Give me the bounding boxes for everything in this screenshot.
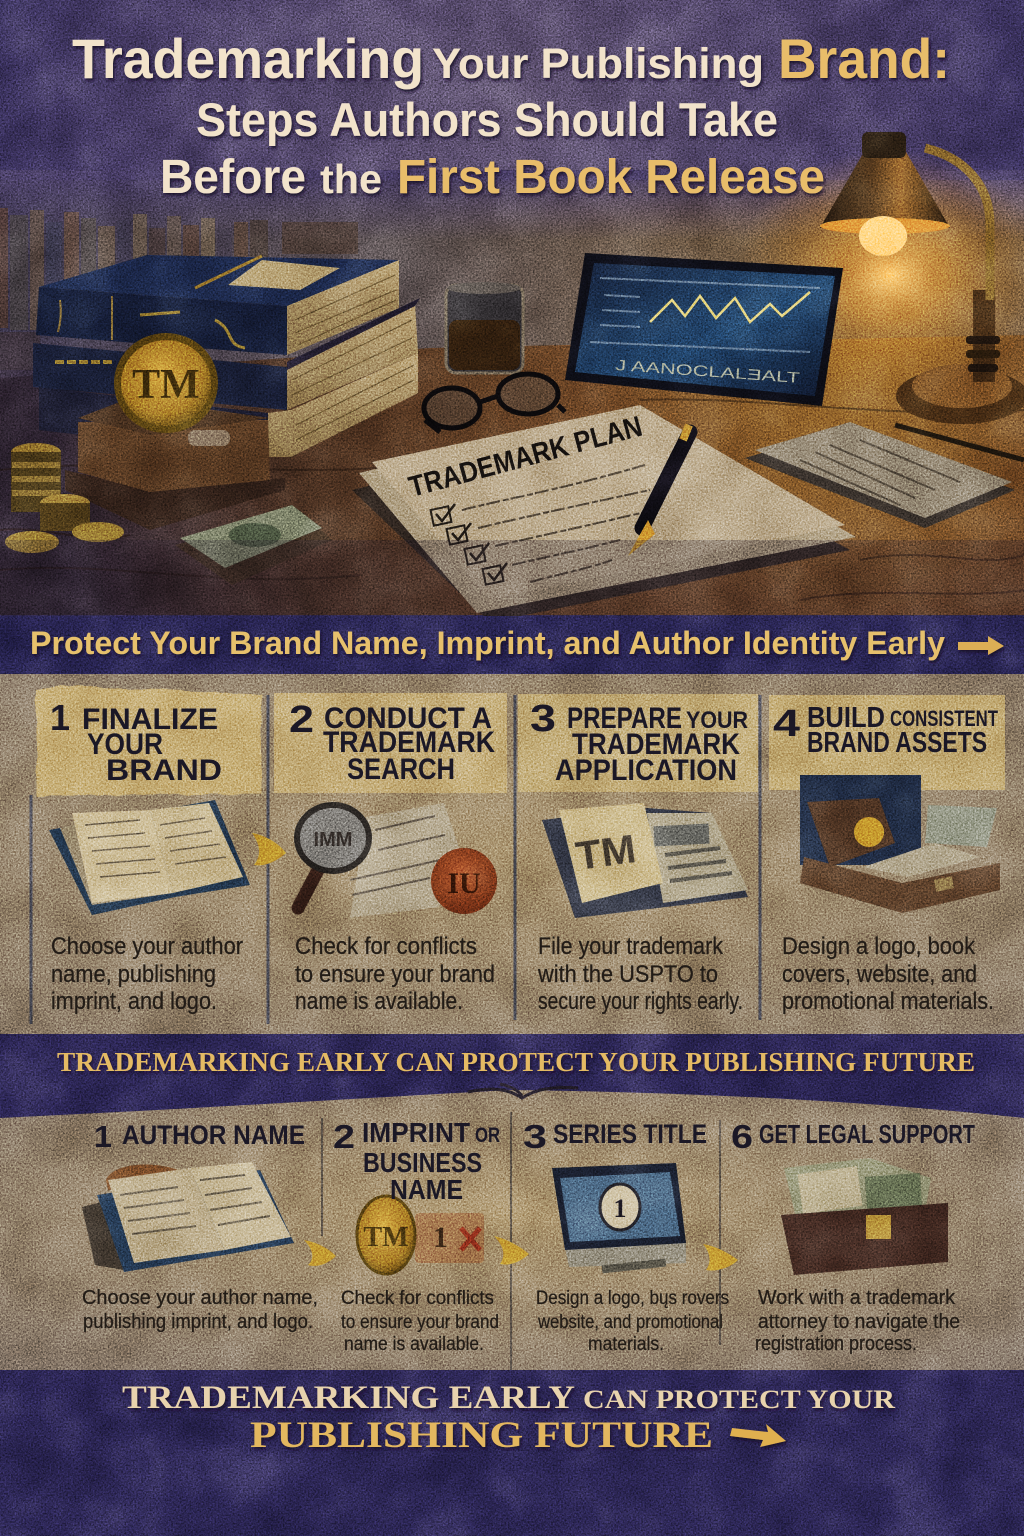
TM coin xyxy=(114,333,218,433)
closing statement: TRADEMARKING EARLY xyxy=(122,1380,575,1416)
trademark plan document xyxy=(352,405,856,622)
tablet with chart: J AANOCLALƎALT xyxy=(615,357,800,387)
bookshelf xyxy=(0,208,358,382)
step 2 heading: TRADEMARK xyxy=(323,726,495,759)
step 2 heading: SEARCH xyxy=(347,753,455,786)
step 3 heading: PREPARE xyxy=(567,702,682,735)
note on book xyxy=(228,260,340,290)
card 2 header xyxy=(274,693,507,793)
item 1 heading: AUTHOR NAME xyxy=(122,1120,305,1150)
tablet with chart xyxy=(565,253,843,406)
band 1 heading: Protect Your Brand Name, Imprint, and Author Identity Early xyxy=(30,625,945,661)
plan checklist xyxy=(431,465,650,585)
steps panel background xyxy=(0,674,1024,1034)
item 4 body: attorney to navigate the xyxy=(758,1311,960,1333)
item 2 heading: BUSINESS xyxy=(363,1147,482,1178)
lamp arm xyxy=(925,148,990,300)
top book xyxy=(36,287,287,355)
step 1 body xyxy=(51,933,243,1015)
step 2 body: to ensure your brand xyxy=(295,961,495,988)
item 1 body: publishing imprint, and logo. xyxy=(83,1311,313,1333)
gold arrow 4 xyxy=(703,1244,738,1271)
closing arrow xyxy=(730,1424,786,1447)
title: Brand: xyxy=(778,27,950,90)
item 3 body: Design a logo, bųs rovers xyxy=(536,1288,729,1309)
item 2 body: name is available. xyxy=(344,1334,484,1355)
middle book xyxy=(33,343,287,410)
item 1 body: Choose your author name, xyxy=(82,1287,318,1309)
step 3 body: with the USPTO to xyxy=(537,961,718,988)
band 1 arrow xyxy=(958,636,1004,655)
step 4 body xyxy=(782,933,994,1015)
wooden box xyxy=(65,398,285,530)
step 4 body: promotional materials. xyxy=(782,988,994,1015)
card 3 header xyxy=(518,694,758,792)
step 3 heading: APPLICATION xyxy=(555,754,737,787)
title: Before xyxy=(160,151,306,204)
lamp glow xyxy=(735,150,1024,400)
step 1 heading: 1 xyxy=(50,697,70,738)
TM coin: TM xyxy=(132,362,200,408)
gold arrow 3 xyxy=(494,1236,529,1265)
item 2 body: Check for conflicts xyxy=(341,1288,494,1309)
book stack xyxy=(33,255,420,457)
lower panel parchment xyxy=(0,1090,1024,1370)
step 4 body: Design a logo, book xyxy=(782,933,976,960)
item 3 body: materials. xyxy=(588,1334,664,1355)
step 3 heading xyxy=(530,698,748,787)
gold arrow 2 xyxy=(304,1240,336,1266)
item 4 body: Work with a trademark xyxy=(758,1287,956,1309)
item 4 body xyxy=(755,1287,960,1355)
item 3 body: website, and promotional xyxy=(537,1312,723,1333)
panel: four steps xyxy=(0,674,1024,1034)
card 2 illustration: magnifier and seal: IMM xyxy=(314,829,352,851)
step 1 body: imprint, and logo. xyxy=(51,988,217,1015)
step 1 body: name, publishing xyxy=(51,961,216,988)
desk surface xyxy=(0,335,1024,615)
step 4 heading xyxy=(773,702,998,759)
step 2 body xyxy=(295,933,495,1015)
item 2 heading: IMPRINT xyxy=(362,1117,470,1148)
title: Trademarking xyxy=(72,27,424,90)
title xyxy=(72,27,950,204)
card 2 illustration: magnifier and seal: IU xyxy=(447,867,481,900)
right notebook xyxy=(745,422,1024,528)
item 2 heading: 2 xyxy=(333,1118,355,1155)
hero illustration: author's desk xyxy=(0,132,1024,622)
step 4 heading: 4 xyxy=(773,703,800,745)
thin dividers xyxy=(322,1112,720,1370)
item 2 heading: OR xyxy=(475,1124,500,1147)
open-book flourish xyxy=(468,1084,578,1098)
item 3 illustration: monitor: 1 xyxy=(614,1194,626,1223)
card 3 illustration: TM book xyxy=(542,803,748,918)
step 3 body xyxy=(537,933,743,1015)
item 1 heading: 1 xyxy=(94,1119,112,1154)
item 2 heading xyxy=(333,1117,500,1205)
closing statement: PUBLISHING FUTURE xyxy=(250,1415,713,1456)
step 1 body: Choose your author xyxy=(51,933,243,960)
item 2 illustration: coin and folder: TM xyxy=(363,1222,409,1253)
closing statement: CAN PROTECT YOUR xyxy=(583,1385,895,1414)
card 3 illustration: TM book: TM xyxy=(573,827,639,879)
step 2 heading xyxy=(289,699,495,786)
item 4 body: registration process. xyxy=(755,1333,917,1355)
card 4 illustration: brand assets box xyxy=(800,775,1000,913)
banknotes xyxy=(175,505,332,585)
lamp shade xyxy=(820,150,950,228)
item 1 body xyxy=(82,1287,318,1333)
step 3 heading: YOUR xyxy=(686,707,748,734)
card 1 header xyxy=(36,686,262,796)
step 2 heading: 2 xyxy=(289,699,314,741)
item 3 heading: SERIES TITLE xyxy=(553,1119,707,1149)
card 2 illustration: magnifier and seal xyxy=(297,803,497,918)
card 1 illustration: open book xyxy=(49,800,250,915)
item 1 illustration: book xyxy=(82,1162,294,1272)
whisky glass xyxy=(446,282,523,373)
item 1 heading xyxy=(94,1119,305,1154)
step 2 body: Check for conflicts xyxy=(295,933,477,960)
step 1 heading xyxy=(50,697,222,787)
column dividers xyxy=(31,695,760,1024)
title: the xyxy=(320,156,382,202)
wall xyxy=(0,180,1024,370)
band: trademarking early xyxy=(0,1034,1024,1120)
lamp base xyxy=(896,368,1024,424)
step 2 body: name is available. xyxy=(295,988,463,1015)
item 3 body xyxy=(536,1288,729,1355)
band 2 heading: TRADEMARKING EARLY CAN PROTECT YOUR PUBLISHING FUTURE xyxy=(57,1047,975,1077)
desk lamp xyxy=(820,132,1024,424)
wood grain xyxy=(0,399,1024,600)
step 3 body: File your trademark xyxy=(538,933,724,960)
item 4 illustration: box of cash xyxy=(781,1158,948,1275)
step 1 heading: BRAND xyxy=(106,754,222,787)
item 3 heading xyxy=(523,1118,707,1155)
coin stacks xyxy=(5,443,124,553)
band: closing call to action xyxy=(0,1370,1024,1536)
step 1 heading: YOUR xyxy=(87,728,163,761)
item 4 heading: 6 xyxy=(731,1118,753,1155)
step 4 heading: BUILD xyxy=(807,702,885,734)
item 2 body xyxy=(341,1288,499,1355)
panel: what to protect xyxy=(0,1084,1024,1370)
bottom book xyxy=(39,387,268,457)
title: First Book Release xyxy=(397,151,825,204)
step 3 body: secure your rights early. xyxy=(538,988,743,1015)
item 2 heading: NAME xyxy=(390,1174,463,1205)
band: protect your brand xyxy=(0,616,1024,674)
item 3 illustration: monitor xyxy=(552,1163,686,1273)
eyeglasses xyxy=(424,374,565,432)
plan heading: TRADEMARK PLAN xyxy=(406,411,646,504)
item 3 heading: 3 xyxy=(523,1118,547,1155)
wall fade xyxy=(0,170,1024,240)
step 2 heading: CONDUCT A xyxy=(324,702,492,735)
item 2 illustration: coin and folder xyxy=(357,1196,484,1274)
closing statement xyxy=(122,1380,895,1456)
item 4 heading xyxy=(731,1118,975,1155)
step 3 heading: TRADEMARK xyxy=(572,728,740,761)
gold arrow 1 xyxy=(252,833,286,865)
title: Your Publishing xyxy=(432,40,764,88)
step 4 body: covers, website, and xyxy=(782,961,977,988)
step 3 heading: 3 xyxy=(530,698,556,740)
card 4 header xyxy=(769,695,1005,790)
hero vignette xyxy=(0,540,1024,618)
step 1 heading: FINALIZE xyxy=(82,703,218,736)
title backdrop xyxy=(0,0,1024,240)
item 2 illustration: coin and folder: 1 xyxy=(433,1221,448,1254)
item 2 body: to ensure your brand xyxy=(341,1312,499,1333)
fountain pen xyxy=(628,425,690,556)
title: Steps Authors Should Take xyxy=(196,93,778,146)
